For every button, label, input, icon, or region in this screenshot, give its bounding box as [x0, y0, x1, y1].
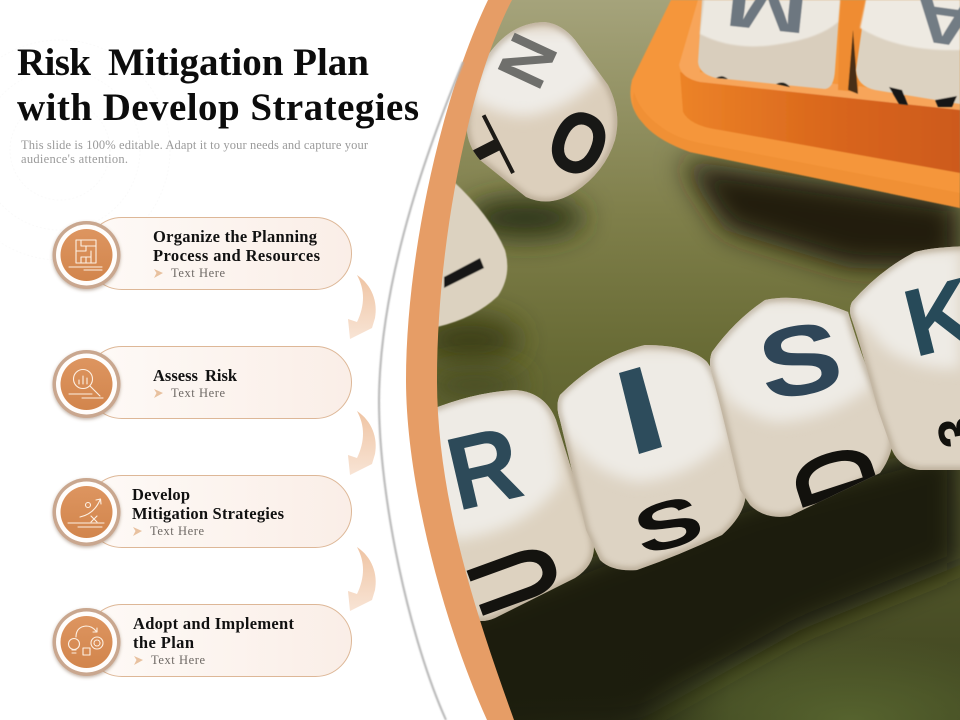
- partial die I at left: [420, 180, 507, 327]
- die S: S: [750, 299, 850, 422]
- icon: strategy play: [52, 478, 120, 546]
- faint background arcs: [0, 40, 170, 260]
- curved arrow 2: [348, 411, 376, 475]
- bullet text: Text Here: [151, 653, 205, 667]
- orange letter tray: [630, 0, 960, 208]
- die S: D: [765, 431, 904, 520]
- die S: [710, 298, 892, 517]
- die R: [438, 390, 594, 621]
- step 2: assess risk: [52, 346, 352, 418]
- step 3: develop mitigation strategies: [52, 476, 352, 548]
- dark table foreground: [430, 440, 960, 720]
- heading: [132, 485, 285, 523]
- tray dice M and A: [698, 0, 960, 107]
- die N and O: N: [482, 22, 572, 99]
- orange curved band: [0, 0, 514, 720]
- table shadow under the tray: [680, 160, 960, 270]
- die N and O: T: [450, 109, 524, 192]
- heading: Develop: [132, 485, 190, 504]
- die I: S: [626, 480, 711, 570]
- heading: [153, 227, 321, 265]
- die N and O: [466, 22, 618, 202]
- title: Risk: [17, 41, 91, 84]
- white left panel: [0, 0, 488, 720]
- subtitle text: This slide is 100% editable. Adapt it to your needs and capture your: [21, 138, 369, 152]
- die R: U: [440, 529, 588, 629]
- icon: idea cycle with gear: [52, 608, 120, 676]
- heading: Risk: [205, 366, 238, 385]
- heading: [153, 366, 238, 385]
- bullet text: Text Here: [171, 386, 225, 400]
- heading: Mitigation Strategies: [132, 504, 285, 523]
- subtitle text: audience's attention.: [21, 152, 128, 166]
- heading: Adopt and Implement: [133, 614, 294, 633]
- die R: R: [436, 404, 532, 533]
- die I: [550, 340, 750, 575]
- step 1: organize the planning process: [52, 218, 352, 290]
- curved arrow 3: [348, 547, 376, 611]
- die K: [845, 240, 960, 475]
- title: Mitigation Plan: [108, 41, 369, 84]
- icon: magnifier with chart: [52, 350, 120, 418]
- heading: [133, 614, 294, 652]
- photo: risk letter dice on a green table: [420, 0, 960, 720]
- title: [17, 41, 419, 129]
- heading: the Plan: [133, 633, 194, 652]
- heading: Process and Resources: [153, 246, 321, 265]
- icon: maze: [52, 221, 120, 289]
- heading: Assess: [153, 366, 199, 385]
- title: with Develop Strategies: [17, 86, 419, 129]
- curved panel shadow line: [379, 62, 463, 720]
- step 4: adopt and implement the plan: [52, 604, 352, 676]
- bullet text: Text Here: [171, 266, 225, 280]
- bullet text: Text Here: [150, 524, 204, 538]
- heading: Organize the Planning: [153, 227, 318, 246]
- die N and O: O: [535, 90, 622, 197]
- subtitle text: [21, 138, 369, 166]
- curved arrow 1: [348, 275, 376, 339]
